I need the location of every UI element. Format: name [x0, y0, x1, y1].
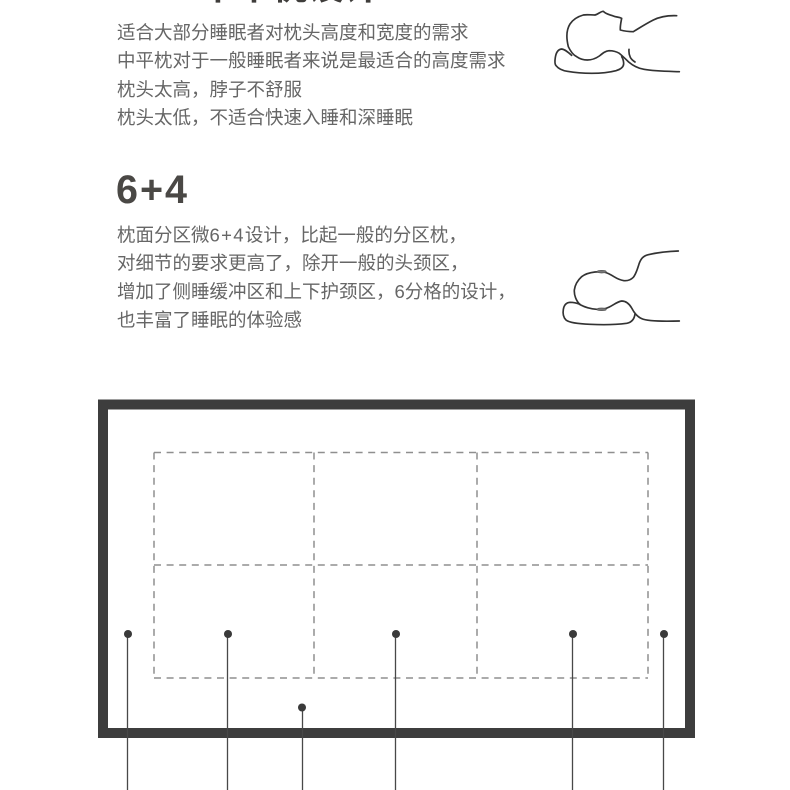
text block: medium pillow description: 枕头太高，脖子不舒服 — [117, 79, 302, 100]
callout leader lines with dots — [124, 630, 668, 790]
thick outer frame — [103, 404, 690, 733]
icon: side sleeper on pillow — [563, 251, 679, 325]
diagram: pillow zoning frame — [103, 404, 690, 790]
text block: 6+4 description: 也丰富了睡眠的体验感 — [117, 309, 302, 330]
text block: medium pillow description: 适合大部分睡眠者对枕头高度和宽度的需求 — [117, 22, 469, 43]
text block: medium pillow description: 枕头太低，不适合快速入睡和深睡眠 — [117, 107, 413, 128]
dashed six-zone grid — [154, 452, 648, 678]
text block: 6+4 description: 枕面分区微6+4设计，比起一般的分区枕， — [117, 224, 467, 245]
text block: medium pillow description: 中平枕对于一般睡眠者来说是最适合的高度需求 — [117, 50, 506, 71]
text block: 6+4 description: 对细节的要求更高了，除开一般的头颈区， — [117, 253, 469, 274]
icon: head lying on back on pillow — [555, 11, 679, 73]
text block: medium pillow description — [117, 22, 506, 128]
heading: 6+4: 6+4 — [116, 168, 189, 212]
text block: 6+4 description: 增加了侧睡缓冲区和上下护颈区，6分格的设计， — [117, 281, 516, 302]
text block: 6+4 description — [117, 224, 516, 330]
